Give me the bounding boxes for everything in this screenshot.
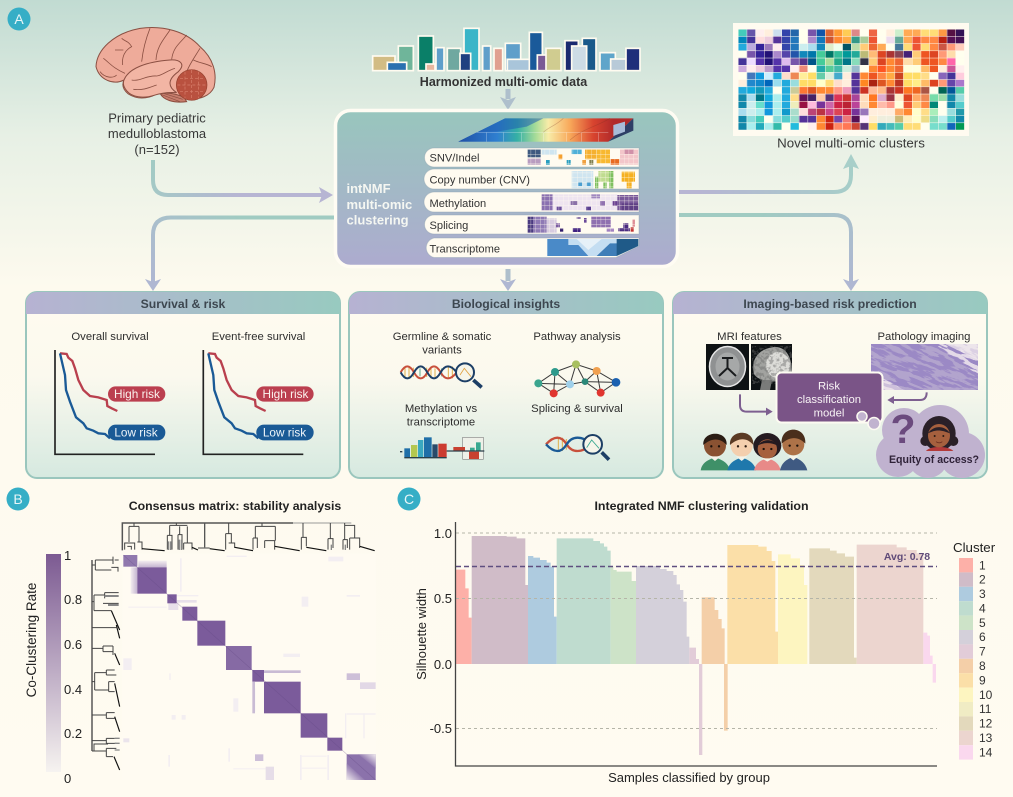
icon: brain with tumour xyxy=(96,27,215,102)
image: pathology slide xyxy=(871,344,978,390)
chart: event-free survival curves xyxy=(203,350,314,454)
y axis title: Silhouette width xyxy=(414,588,429,680)
arrow: pathology to model xyxy=(887,392,927,404)
header bar: Imaging-based risk prediction xyxy=(743,297,917,311)
row: Copy number xyxy=(424,169,639,189)
question mark: ? xyxy=(890,406,916,452)
image: axial MRI xyxy=(706,344,749,390)
badge A xyxy=(8,8,30,30)
image: sagittal MRI xyxy=(751,344,792,390)
legend labels: 4 xyxy=(979,602,986,616)
arrow: clustering to novel clusters xyxy=(679,154,859,192)
label: novel clusters: Novel multi-omic clusters xyxy=(777,136,925,150)
title: NMF validation: Integrated NMF clustering validation xyxy=(594,499,809,513)
header bar xyxy=(26,292,340,314)
label: methylation vs transcriptome xyxy=(405,403,477,428)
heading: intNMF: intNMF xyxy=(346,181,391,196)
icon: methylation bar chart xyxy=(400,437,484,459)
silhouette bars: clusters 1 to 7 xyxy=(456,536,702,755)
icon: DNA with magnifier xyxy=(401,363,482,387)
panel: intNMF clustering box xyxy=(336,110,678,266)
label: splicing and survival: Splicing & survival xyxy=(531,403,623,415)
brain label: (n=152) xyxy=(134,142,180,157)
legend labels: 6 xyxy=(979,630,986,644)
panel: biological insights xyxy=(349,292,663,478)
arrow: clustering to biological insights xyxy=(500,269,516,291)
label: MRI features: MRI features xyxy=(717,331,782,343)
label: methylation vs transcriptome: transcriptome xyxy=(407,416,475,428)
row: Methylation xyxy=(424,192,639,212)
heading: intNMF xyxy=(346,181,412,228)
colour bar xyxy=(24,548,82,786)
row: Transcriptome xyxy=(426,238,639,258)
icon: DNA splicing magnifier xyxy=(546,435,609,460)
arrow: clustering to survival xyxy=(145,218,334,291)
panel: survival and risk xyxy=(26,292,340,478)
child 4 xyxy=(780,430,807,470)
label: high risk: High risk xyxy=(263,387,309,401)
legend: clusters: Cluster xyxy=(953,540,996,555)
tick labels: 0.8 xyxy=(64,592,82,607)
arrow: MRI to model xyxy=(740,394,773,416)
label: pathway analysis: Pathway analysis xyxy=(533,331,621,343)
heading: intNMF: multi-omic xyxy=(346,197,412,212)
grid lines xyxy=(456,533,937,728)
swatches xyxy=(959,558,973,760)
label: germline variants xyxy=(393,331,492,356)
header bar xyxy=(349,292,663,314)
legend labels xyxy=(979,558,993,760)
y tick labels: 0.5 xyxy=(434,591,452,606)
heatmap: consensus matrix xyxy=(122,553,376,780)
3D data block xyxy=(458,118,633,142)
label: high risk: High risk xyxy=(114,387,160,401)
child 2 xyxy=(727,433,756,470)
silhouette bars: clusters 8 to 14 xyxy=(702,545,936,731)
tick labels: 0.2 xyxy=(64,726,82,741)
tick labels: 0.6 xyxy=(64,637,82,652)
tick labels: 0 xyxy=(64,771,71,786)
legend labels: 1 xyxy=(979,558,986,572)
label: germline variants: Germline & somatic xyxy=(393,331,492,343)
label: overall survival: Overall survival xyxy=(71,331,149,343)
label: methylation vs transcriptome: Methylation vs xyxy=(405,403,477,415)
thought bubble circles xyxy=(857,412,880,430)
title: consensus matrix: Consensus matrix: stability analysis xyxy=(129,499,341,513)
arrow: clustering to imaging xyxy=(679,215,859,291)
legend labels: 11 xyxy=(979,702,992,716)
row: Splicing: Splicing xyxy=(430,220,468,232)
legend labels: 7 xyxy=(979,644,986,658)
chart: overall survival curves xyxy=(55,350,165,454)
child 3 xyxy=(753,433,781,470)
box: risk classification model xyxy=(776,372,882,422)
label: average: Avg: 0.78 xyxy=(884,551,930,563)
axes xyxy=(456,522,937,766)
row: Transcriptome: Transcriptome xyxy=(430,244,500,256)
box: risk classification model: Risk xyxy=(818,380,840,392)
legend labels: 5 xyxy=(979,616,986,630)
header bar: Biological insights xyxy=(452,297,560,311)
label: event-free survival: Event-free survival xyxy=(212,331,305,343)
heading: intNMF: clustering xyxy=(346,212,409,228)
label: low risk: Low risk xyxy=(263,426,306,440)
badge C xyxy=(398,488,420,510)
tick labels: 1 xyxy=(64,548,71,563)
box: risk classification model: classification xyxy=(797,394,861,406)
axis title: Co-Clustering Rate xyxy=(24,583,39,697)
legend labels: 10 xyxy=(979,688,993,702)
row: Methylation: Methylation xyxy=(430,198,486,210)
heading: harmonized data: Harmonized multi-omic data xyxy=(420,75,588,89)
tick labels xyxy=(64,548,82,786)
arrow: tumour samples to clustering xyxy=(153,160,333,203)
tick labels: 0.4 xyxy=(64,682,82,697)
box: risk classification model: model xyxy=(814,408,844,420)
average line xyxy=(456,566,937,568)
y tick labels: 1.0 xyxy=(434,526,452,541)
badge C: C xyxy=(404,491,414,507)
label: germline variants: variants xyxy=(422,344,462,356)
legend labels: 8 xyxy=(979,659,986,673)
label: equity of access: Equity of access? xyxy=(889,454,979,466)
badge B xyxy=(6,488,30,510)
label: low risk: Low risk xyxy=(114,426,158,440)
arrow: data to clustering xyxy=(500,89,516,110)
badge A: A xyxy=(14,11,24,27)
badge B: B xyxy=(13,491,23,507)
header bar: Survival & risk xyxy=(141,297,226,311)
header bar xyxy=(673,292,987,314)
y tick labels xyxy=(430,526,452,736)
row: SNV/Indel: SNV/Indel xyxy=(430,152,479,164)
legend labels: 9 xyxy=(979,674,986,688)
y tick labels: 0.0 xyxy=(434,657,452,672)
brain label xyxy=(108,110,207,157)
legend labels: 3 xyxy=(979,587,986,601)
child 1 xyxy=(701,434,730,470)
legend labels: 14 xyxy=(979,746,993,760)
dendrogram: left xyxy=(92,557,120,770)
x axis title: Samples classified by group xyxy=(608,770,770,785)
chart: silhouette plot xyxy=(414,522,937,785)
icon: four children xyxy=(701,430,807,470)
legend labels: 13 xyxy=(979,731,993,745)
brain label: Primary pediatric xyxy=(108,110,206,126)
bar chart icon: harmonized data xyxy=(373,28,640,71)
icon: pathway network xyxy=(534,360,620,397)
row: SNV/Indel xyxy=(424,148,639,167)
legend labels: 2 xyxy=(979,572,986,586)
y tick labels: -0.5 xyxy=(430,721,452,736)
dendrogram: top xyxy=(122,523,375,551)
row: Copy number: Copy number (CNV) xyxy=(430,174,530,186)
legend: clusters xyxy=(953,540,996,760)
panel: imaging-based risk prediction xyxy=(672,291,988,479)
legend labels: 12 xyxy=(979,716,993,730)
brain label: medulloblastoma xyxy=(108,126,207,141)
row: Splicing xyxy=(424,215,639,234)
callout: equity of access xyxy=(876,405,985,478)
icon: woman xyxy=(920,416,958,451)
heatmap: novel clusters xyxy=(733,23,969,136)
label: pathology imaging: Pathology imaging xyxy=(878,331,970,343)
